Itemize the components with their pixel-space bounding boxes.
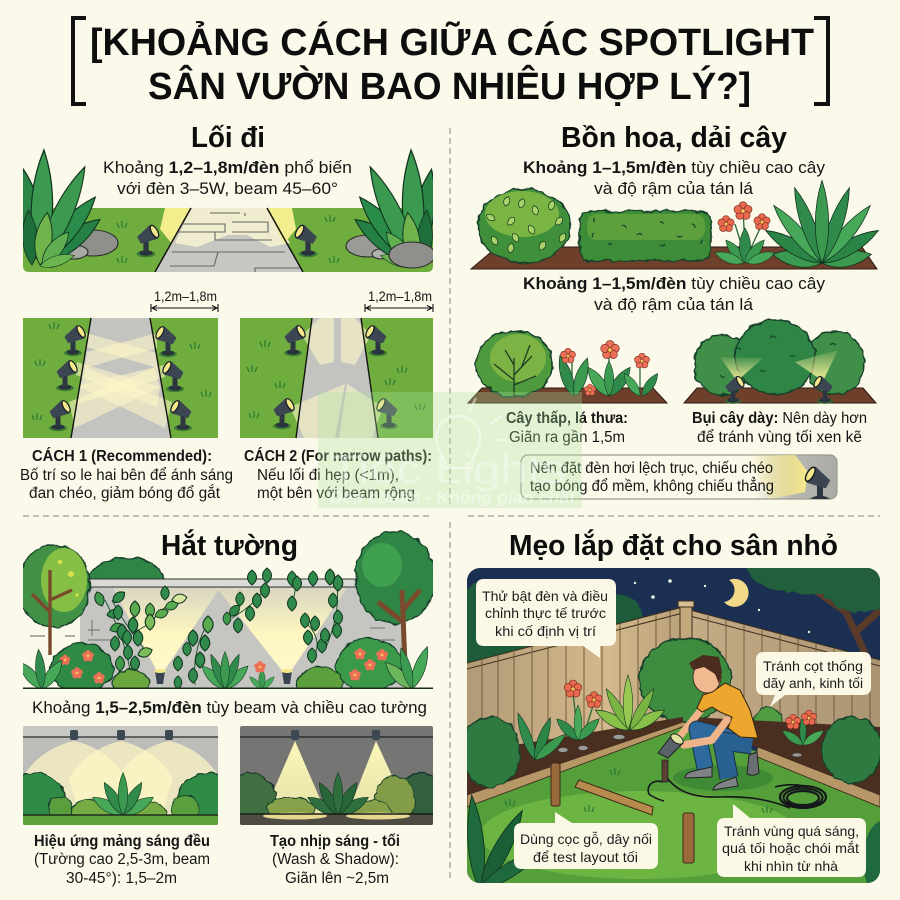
callout: test lights: chỉnh thực tế trước <box>485 605 606 621</box>
callout: off-axis aiming: tạo bóng đổ mềm, không chiếu thẳng <box>530 477 774 495</box>
caption: even wash: 30-45°): 1,5–2m <box>66 870 177 887</box>
rear arm <box>680 710 701 736</box>
caption: method 2: CÁCH 2 (For narrow paths): <box>244 448 432 465</box>
callout: stakes and cord: để test layout tối <box>533 849 638 865</box>
caption: wash and shadow: Giãn lên ~2,5m <box>285 870 389 887</box>
lamp being placed <box>658 735 683 758</box>
caption: dense bushes: để tránh vùng tối xen kẽ <box>697 429 862 446</box>
callout: glare: Tránh vùng quá sáng, <box>724 823 859 839</box>
front leg <box>722 741 752 778</box>
night garden illustration <box>467 568 880 883</box>
caption: method 1: đan chéo, giảm bóng đổ gắt <box>29 485 221 502</box>
callout: avoid wiring tangle: dãy anh, kinh tối <box>763 675 863 691</box>
callout: off-axis aiming: Nên đặt đèn hơi lệch trục, chiếu chéo <box>530 460 773 477</box>
callout: glare <box>717 804 866 877</box>
torso <box>697 683 758 738</box>
man installing light <box>658 655 759 790</box>
diagram: wash and shadow <box>240 726 433 825</box>
panel: Bồn hoa, dải cây <box>468 122 882 504</box>
caption: method 1: CÁCH 1 (Recommended): <box>32 448 212 465</box>
flower bed illustration <box>471 180 882 271</box>
caption: method 2: Nếu lối đi hẹp (<1m), <box>257 467 399 484</box>
caption: wash and shadow: (Wash & Shadow): <box>272 851 399 868</box>
caption: even wash: (Tường cao 2,5-3m, beam <box>34 851 210 868</box>
illustration: dense bushes with lights <box>684 320 876 404</box>
title <box>73 18 828 108</box>
spacing text <box>103 158 352 198</box>
flowers <box>713 202 777 267</box>
cable and coil <box>648 775 826 808</box>
plant: left foliage <box>23 148 101 268</box>
diagram: staggered layout <box>23 318 218 438</box>
caption: wash and shadow <box>270 833 400 887</box>
back shoe <box>747 752 759 775</box>
rear leg <box>697 729 752 768</box>
panel: Lối đi <box>13 122 442 502</box>
callout: test lights <box>476 579 616 658</box>
spacing text: với đèn 3–5W, beam 45–60° <box>117 179 338 198</box>
callout: avoid wiring tangle <box>756 652 871 707</box>
diagram: narrow path layout <box>240 318 433 438</box>
arm <box>684 720 727 745</box>
spiky plant <box>762 180 882 271</box>
caption: method 1 <box>20 448 233 502</box>
hedge <box>580 211 711 261</box>
spacing text repeated <box>523 274 826 314</box>
caption: low plants: Giãn ra gần 1,5m <box>509 429 625 446</box>
caption: low plants: Cây thấp, lá thưa: <box>506 410 628 427</box>
vines <box>93 568 343 689</box>
callout: test lights: khi cố định vị trí <box>495 623 596 639</box>
callout: stakes and cord <box>514 812 658 869</box>
spacing text: Khoảng 1–1,5m/đèn tùy chiều cao cây <box>523 158 826 177</box>
dimension: left diagram: 1,2m–1,8m <box>154 289 217 304</box>
bush center <box>638 637 782 722</box>
left tree <box>18 545 90 655</box>
round shrub <box>478 189 570 263</box>
illustration: sparse low plants <box>468 331 667 403</box>
caption: even wash: Hiệu ứng mảng sáng đều <box>34 833 210 850</box>
callout: test lights: Thử bật đèn và điều <box>482 588 608 604</box>
caption: method 2 <box>244 448 432 502</box>
plant: right foliage <box>354 148 433 268</box>
title: [KHOẢNG CÁCH GIỮA CÁC SPOTLIGHT <box>90 20 814 64</box>
heading: Lối đi <box>191 122 265 154</box>
bed plants <box>460 675 882 787</box>
moon and stars <box>634 579 810 633</box>
spacing text repeated: và độ rậm của tán lá <box>594 295 754 314</box>
head <box>692 667 722 694</box>
heading: Mẹo lắp đặt cho sân nhỏ <box>509 528 838 562</box>
caption: even wash <box>34 833 210 887</box>
background trees <box>467 582 643 662</box>
watermark: Tiéc Lights <box>330 448 566 492</box>
spacing text: Khoảng 1,5–2,5m/đèn tùy beam và chiều cao tường <box>32 698 427 717</box>
callout: avoid wiring tangle: Tránh cọt thống <box>763 658 863 674</box>
caption: dense bushes <box>692 410 867 446</box>
spacing text: Khoảng 1,2–1,8m/đèn phổ biến <box>103 158 352 177</box>
wall illustration <box>15 532 435 703</box>
caption: dense bushes: Bụi cây dày: Nên dày hơn <box>692 410 867 427</box>
dimension: right diagram: 1,2m–1,8m <box>368 289 432 304</box>
fence <box>467 601 880 760</box>
dimension: right diagram <box>365 289 433 312</box>
rocks right <box>346 235 390 259</box>
walkway illustration <box>13 150 442 272</box>
panel: Hắt tường <box>5 528 446 887</box>
diagram: even wash <box>23 726 218 825</box>
callout: stakes and cord: Dùng cọc gỗ, dây nối <box>520 831 652 847</box>
soil beds <box>467 717 683 795</box>
edging <box>467 722 690 807</box>
heading: Bồn hoa, dải cây <box>561 122 787 154</box>
caption: method 2: một bên với beam rộng <box>257 485 415 502</box>
shoes <box>685 767 712 778</box>
callout: glare: khi nhìn từ nhà <box>744 858 838 874</box>
dimension: left diagram <box>151 289 218 312</box>
caption: low plants <box>506 410 628 446</box>
watermark <box>318 392 582 508</box>
panel: Mẹo lắp đặt cho sân nhỏ <box>467 529 880 883</box>
rocks left <box>68 230 118 260</box>
foreground plants <box>23 636 428 688</box>
right tree <box>355 532 435 665</box>
title: SÂN VƯỜN BAO NHIÊU HỢP LÝ?] <box>148 64 751 108</box>
test stakes and plank <box>551 763 694 863</box>
callout: glare: quá tối hoặc chói mắt <box>722 840 859 856</box>
lawn <box>467 726 880 883</box>
lamps <box>154 669 293 684</box>
watermark: Đèn chuẩn - Không gian chất <box>330 488 576 507</box>
foreground foliage <box>464 795 900 900</box>
spacing text: và độ rậm của tán lá <box>594 179 754 198</box>
heading: Hắt tường <box>161 528 298 562</box>
caption: method 1: Bố trí so le hai bên để ánh sáng <box>20 467 233 484</box>
callout: off-axis aiming <box>521 455 837 504</box>
spacing text <box>523 158 826 198</box>
caption: wash and shadow: Tạo nhịp sáng - tối <box>270 833 400 850</box>
rock front right <box>389 242 435 268</box>
spacing text repeated: Khoảng 1–1,5m/đèn tùy chiều cao cây <box>523 274 826 293</box>
